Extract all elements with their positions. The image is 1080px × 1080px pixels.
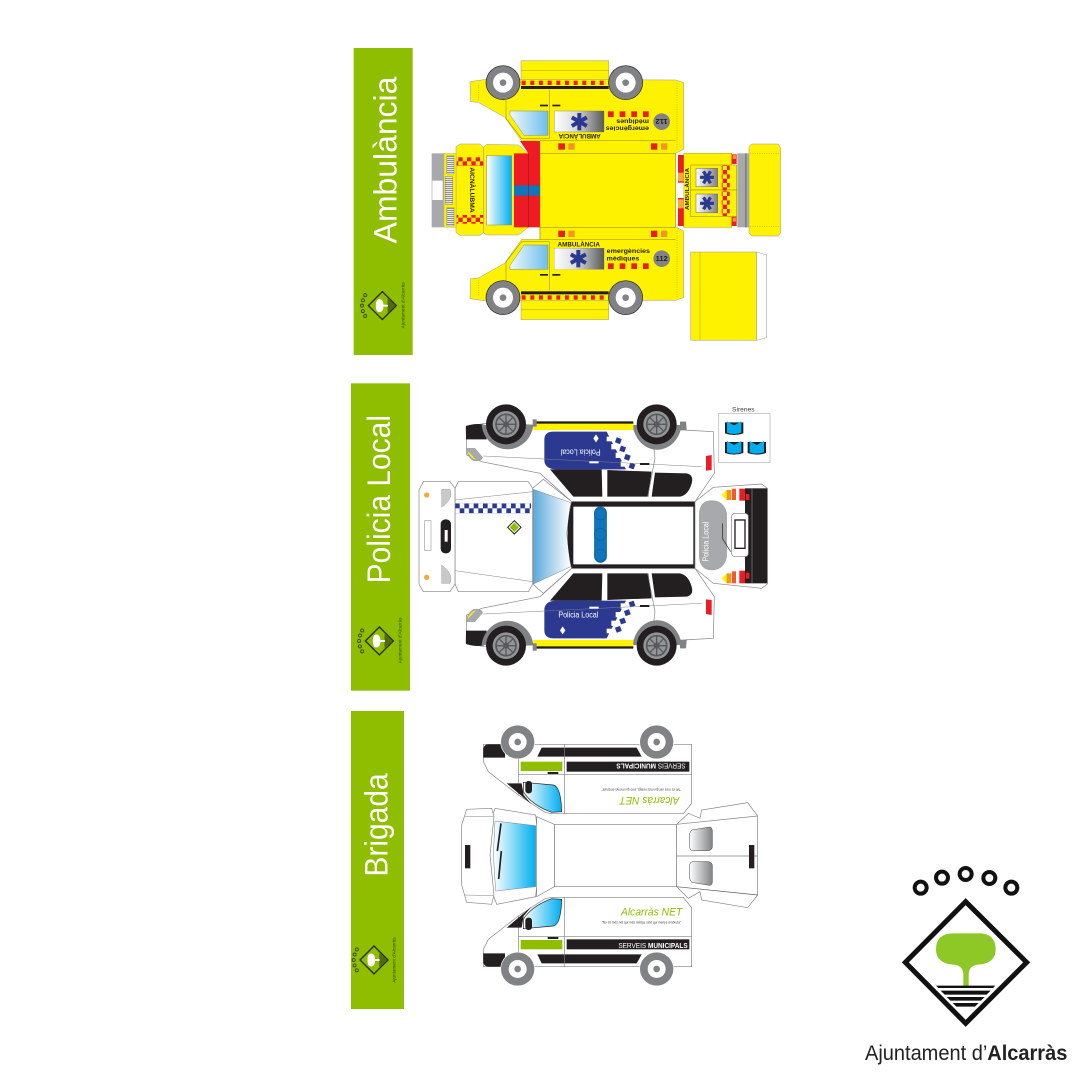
ambulance upper side panel: AMBULÀNCIA <box>558 132 601 141</box>
logo: diamond frame <box>905 902 1027 1023</box>
van rear panel <box>677 803 758 908</box>
ambulance lower side panel: AMBULÀNCIA <box>558 240 600 249</box>
van lower side panel: "No és més net qui més neteja, sinó qui menys embruta" <box>602 920 682 924</box>
van upper side panel <box>483 725 692 814</box>
logo: green tree <box>936 933 996 986</box>
ambulance rear panel <box>678 144 781 236</box>
ambulance upper side panel: mèdiques <box>616 117 649 124</box>
police rear panel <box>695 484 767 588</box>
green banner: Brigada: Brigada <box>358 773 395 877</box>
panel: police cut-out <box>351 383 770 691</box>
green banner: Ambulància <box>354 48 413 355</box>
police upper side panel <box>466 404 714 502</box>
van windshield and wipers <box>490 808 537 904</box>
green banner: Ambulància: Ambulància <box>367 76 404 243</box>
logo: Ajuntament d'Alcarràs <box>865 868 1067 1065</box>
police rear panel: Policia Local <box>701 521 710 562</box>
green banner: Ambulància: Ajuntament d'Alcarràs <box>400 282 406 328</box>
van front panel <box>462 808 494 904</box>
panel: municipal van cut-out <box>351 711 758 1009</box>
green banner: Policia Local: Ajuntament d'Alcarràs <box>398 617 404 663</box>
sirens cut-out box: Sirenes <box>732 407 755 414</box>
loose yellow box piece <box>691 252 767 340</box>
police lower side panel <box>466 568 714 666</box>
green banner: Brigada <box>351 711 404 1009</box>
ambulance lower side panel: 112 <box>656 254 668 263</box>
green banner: Brigada: Ajuntament d'Alcarràs <box>392 937 398 983</box>
ambulance front panel <box>432 144 483 235</box>
ambulance front panel: AICNÀLUBMA <box>468 167 477 213</box>
ambulance upper side panel: emergències <box>605 124 649 131</box>
police upper side panel: Policia Local <box>560 447 601 456</box>
ambulance upper side panel <box>470 61 684 153</box>
panel: ambulance cut-out <box>354 48 781 355</box>
police hood and windshield <box>455 479 572 593</box>
ambulance lower side panel <box>470 227 684 320</box>
police front bumper <box>419 482 455 592</box>
police roof with siren bar <box>567 502 695 568</box>
green banner: Policia Local: Policia Local <box>360 415 397 583</box>
van lower side panel: SERVEIS MUNICIPALS <box>618 941 688 950</box>
ambulance lower side panel: mèdiques <box>607 255 640 262</box>
van upper side panel: SERVEIS MUNICIPALS <box>616 762 686 771</box>
police lower side panel: Policia Local <box>558 611 599 620</box>
logo wordmark: Ajuntament d’Alcarràs <box>865 1042 1067 1065</box>
ambulance roof and windshield frame <box>483 141 676 240</box>
ambulance upper side panel: 112 <box>656 117 668 126</box>
sirens cut-out box <box>719 407 770 463</box>
ambulance lower side panel: emergències <box>607 248 650 255</box>
van upper side panel: "No és més net qui més neteja, sinó qui menys embruta" <box>601 787 681 791</box>
van lower side panel <box>483 897 692 986</box>
van upper side panel: Alcarràs NET <box>618 794 680 806</box>
ambulance rear panel: AMBULÀNCIA <box>684 168 691 210</box>
logo: ground stripes <box>936 986 995 1007</box>
van roof <box>537 817 677 897</box>
green banner: Policia Local <box>351 383 410 691</box>
logo: five rings <box>915 868 1017 894</box>
van lower side panel: Alcarràs NET <box>620 907 683 919</box>
